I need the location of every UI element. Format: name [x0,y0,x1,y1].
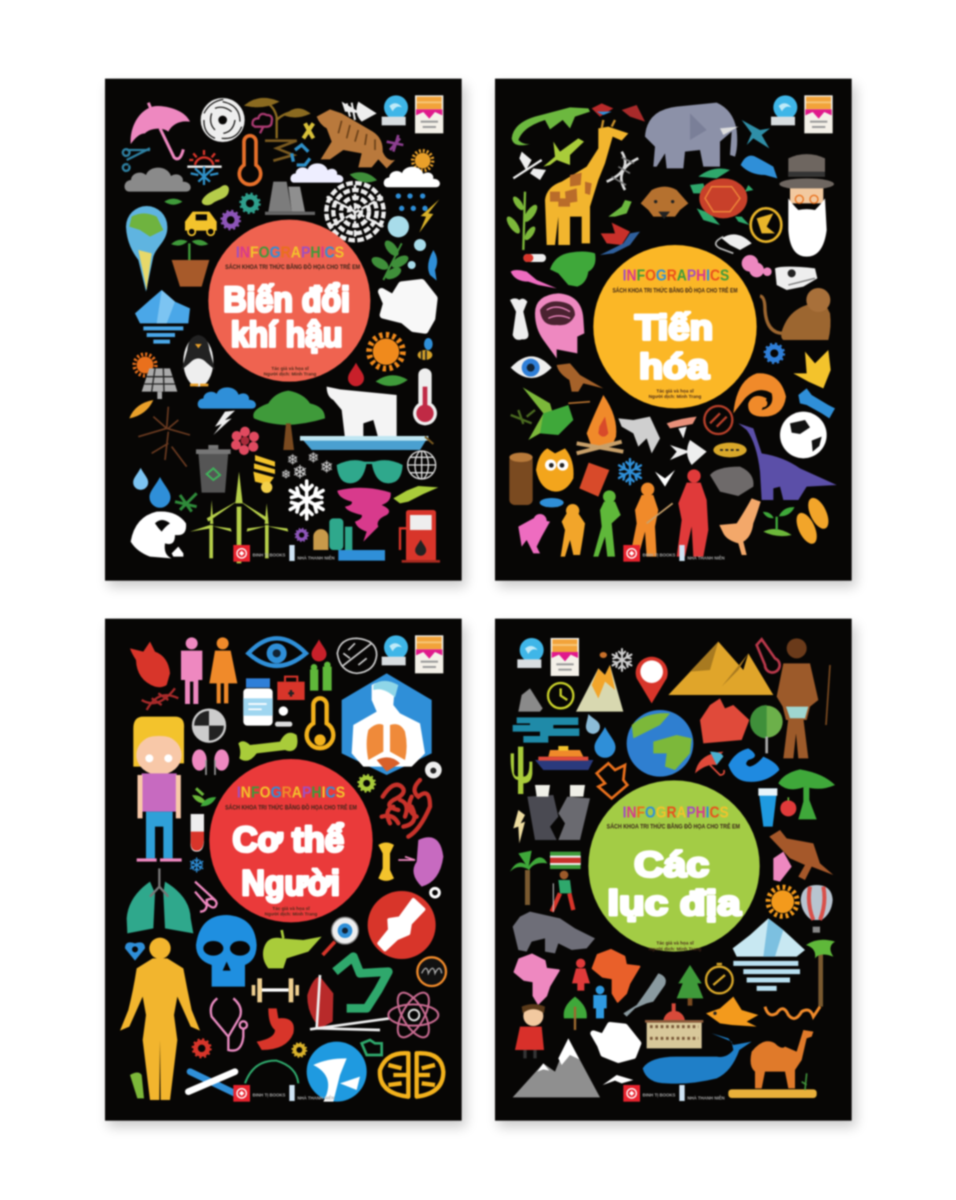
icon: dragonfly [175,493,197,512]
icon: small green bird [608,200,632,217]
icon: red medical kit [277,677,305,700]
icon: compass [706,964,733,993]
icon: blue wave [728,748,779,782]
icon: red joint disc [368,891,436,959]
publisher marks: NHÀ THANH NIÊN [297,555,335,560]
icon: snowflake [611,649,633,671]
title circle: SÁCH KHOA TRI THỨC BẰNG ĐỒ HỌA CHO TRẺ EM [225,261,360,271]
icon: orange woman [209,637,237,703]
icon: yellow brain [380,1053,443,1097]
icon: crossed bones [188,1072,235,1093]
publisher marks: ĐINH TỊ BOOKS [643,1093,675,1098]
icon: owl [536,448,574,492]
icon: campfire [577,395,623,453]
book shadows [108,85,856,1127]
title circle: khí hậu [231,316,342,355]
icon: glass of water [758,788,777,827]
icon: snowy peak [603,1075,633,1085]
publisher badges [382,635,443,673]
icon: pink umbrella [131,103,190,159]
icon: blue snowflake [190,858,204,872]
icon: green tree [564,997,587,1030]
title circle: SÁCH KHOA TRI THỨC BẰNG ĐỒ HỌA CHO TRẺ EM [225,801,357,811]
icon: apple [780,797,796,816]
icon: red gear [193,1039,211,1057]
icon: green bird [543,138,584,167]
icon: green lizard [512,107,590,145]
series name: INFOGRAPHICS [236,244,344,261]
icon: brown dog [641,187,688,219]
icon: seedling in pot [171,238,209,287]
icon: canyon [527,785,590,840]
icon: red Australia [700,698,749,743]
icon: green branch [369,238,410,282]
icon: white coral [326,183,384,240]
title circle: SÁCH KHOA TRI THỨC BẰNG ĐỒ HỌA CHO TRẺ EM [607,821,740,831]
icon: leaf [164,199,182,205]
icon: red heart [130,642,170,687]
icon: white dragonfly [513,152,546,180]
icon: hiker [552,871,573,912]
icon: child in red [515,1004,545,1058]
icon: orange leaf outline [597,763,627,798]
icon: white ring [431,888,439,897]
icon: skin circle [417,957,446,986]
icon: yellow bulb [253,455,275,493]
icon: green leaf [349,170,378,185]
icon: small umbrella [695,752,724,775]
icon: green frog [550,251,595,287]
icon: pink head with brain [535,293,584,358]
icon: yellow oval fossil [751,208,781,242]
icon: dumbbell [252,978,299,1002]
icon: green gear [358,775,375,792]
icon: lake [513,717,579,743]
icon: orange fish [706,997,758,1027]
icon: white mouse [716,234,752,253]
icon: magnified eye [323,917,358,955]
icon: blue eye [248,638,306,666]
icon: fish skeleton [342,102,377,122]
icon: turtle [690,168,753,225]
icon: sand strip and plant [728,1073,817,1098]
title circle: Tác giả và họa sĩ [271,366,309,371]
icon: scissors [123,148,150,171]
icon: grey mountains [513,1038,600,1097]
icon: seedling and test tube [190,788,218,852]
icon: log [509,453,533,505]
icon: lightning [513,810,525,843]
icon: Darwin portrait [779,154,834,257]
icon: ammonite [733,373,786,417]
icon: arm muscle [307,975,390,1030]
icon: fish bones [670,440,707,465]
icon: yellow car [185,212,217,235]
icon: blue snowflake [617,459,643,484]
icon: white football [425,762,442,778]
icon: grasshopper [511,410,535,424]
icon: spiral hurricane [201,98,245,142]
icon: teal lungs [127,868,193,933]
series name: INFOGRAPHICS [623,804,729,821]
title circle: Tác giả và họa sĩ [656,940,694,945]
icon: purple insect [387,135,403,152]
icon: dome and tanks [313,518,385,561]
icon: orange leaf [129,400,153,418]
icon: orange sun [369,335,403,369]
icon: pink ape [518,514,550,553]
icon: hand with leaf [393,486,438,503]
icon: tiger [317,109,395,168]
icon: green leaf [375,374,408,387]
icon: orange Africa [593,950,639,1002]
icon: black white disc [193,710,225,742]
publisher badges [771,95,833,133]
title circle: lục địa [607,884,741,923]
icon: pine tree [677,965,703,1006]
icon: eye [511,356,552,378]
icon: giraffe [545,120,628,245]
icon: small snowflakes [282,452,332,478]
icon: kangaroo [769,830,833,880]
book cover: Cơ thể người [105,619,462,1121]
book cover: Tiến hóa [495,79,852,581]
title circle: SÁCH KHOA TRI THỨC BẰNG ĐỒ HỌA CHO TRẺ EM [612,285,737,295]
icon: blue fish [741,156,777,178]
icon: purple dinosaur [738,423,837,500]
icon: orange snake [765,1007,820,1018]
icon: hot air balloon [801,885,833,933]
icon: rain [396,193,428,211]
icon: red book [579,463,609,497]
icon: white arrow [655,470,675,487]
icon: palm tree [806,940,835,1007]
icon: blue circle [307,1042,367,1102]
icon: red human [677,469,708,557]
icon: blue whale [643,1033,752,1084]
icon: red and blue bird [600,223,640,255]
icon: grey elephant [645,103,738,168]
title circle: Người dịch: Minh Trang [649,394,702,399]
icon: green aviator glasses [337,460,403,483]
icon: brown monkey [760,288,831,340]
title circle: hóa [639,347,709,386]
publisher marks: NHÀ THANH NIÊN [297,1095,335,1100]
icon: grey cloud [125,168,191,192]
icon: yellow thermometer [307,698,333,748]
icon: pink flower [231,427,259,455]
icon: bee [418,338,433,360]
icon: bubbles and fish [408,239,437,281]
title circle: Người dịch: Minh Trang [265,911,318,916]
icon: red birds [592,103,645,122]
icon: thermometer bulb [314,734,326,746]
icon: atom [388,988,438,1042]
title circle [588,780,760,952]
icon: red DNA [142,688,178,710]
icon: green plant [504,192,540,250]
icon: red thermometer [757,639,780,672]
icon: green thumb [362,1040,382,1055]
icon: blue virus [765,344,784,363]
icon: hen [719,498,761,555]
icon: melting globe [126,206,167,292]
icon: dark zigzag [265,141,297,161]
icon: pink organ [398,837,443,887]
icon: purple flower [222,211,240,229]
icon: white bone [510,298,528,340]
icon: green colon [335,957,388,1008]
icon: cactus [511,747,532,794]
icon: rhino [513,912,595,953]
publisher marks: ĐINH TỊ BOOKS [253,1093,285,1098]
icon: orange feet [792,495,833,547]
icon: pink tadpole [511,270,557,288]
publisher marks: NHÀ THANH NIÊN [687,555,725,560]
icon: polar bear on ice [300,387,428,450]
icon: blue iceberg [135,290,190,342]
icon: anatomy hexagon [342,673,432,775]
icon: recycling bin [196,445,231,493]
icon: green early human [593,490,621,557]
icon: two drops [133,468,170,508]
icon: yellow cross [303,123,313,138]
icon: green pancreas [263,930,322,968]
icon: blue cloud and lightning [198,387,256,435]
publisher marks: NHÀ THANH NIÊN [687,1095,725,1100]
icon: teal virus [240,194,259,213]
title circle: Cơ thể [232,821,344,860]
icon: penguin [182,335,215,387]
icon: red drop [311,639,326,661]
icon: orange thermometer [239,136,261,184]
icon: volcano [576,652,623,712]
icon: pink stethoscope [211,998,247,1051]
title circle [593,245,757,408]
series name: INFOGRAPHICS [237,784,345,801]
icon: cooling towers [265,182,315,215]
icon: pink nerve [195,882,217,912]
icon: grey rabbit [618,417,660,453]
icon: teal pterosaur [742,120,770,148]
icon: mushrooms [667,417,697,438]
icon: white globe [780,412,827,458]
icon: blue heart [125,942,145,961]
icon: white Antarctica [593,1025,638,1060]
title circle: Tác giả và họa sĩ [272,906,310,911]
icon: sprout [762,504,796,536]
icon: red woman [572,959,590,991]
icon: tiny insect [425,437,433,444]
icon: lightning [419,199,439,233]
icon: pink kidneys [192,749,229,775]
icon: acacia tree [778,769,835,819]
icon: large snowflake [288,481,326,519]
icon: ice ball [388,216,409,237]
icon: yellow human body [120,938,200,1100]
icon: pills [275,706,292,727]
icon: white cloud [290,163,343,183]
icon: green group [310,662,332,691]
title circle [209,759,373,922]
icon: seal [623,973,666,1017]
publisher marks [233,1085,335,1102]
icon: green bone [238,733,297,761]
icon: wire globe [408,451,436,479]
icon: purple flower [295,529,308,541]
publisher marks [623,1085,725,1102]
icon: dry roots [138,407,190,467]
icon: map pin [636,657,668,703]
icon: pink Africa [514,954,559,1004]
icon: yellow bone [378,842,394,881]
icon: green footprint [200,185,231,206]
icon: recycle [292,145,310,165]
icon: hummingbird [523,387,590,440]
title circle: Tiến [635,308,713,347]
icon: flag [550,852,581,869]
icon: blue bone [798,388,835,418]
icon: white Antarctica [382,283,434,330]
title circle: Các [634,846,709,885]
icon: sun and frost [187,150,222,185]
publisher marks [233,545,335,562]
icon: medicine jar [243,678,273,726]
publisher marks [623,545,725,562]
icon: blue bacterium [540,498,564,507]
title circle: Người dịch: Minh Trang [649,946,702,951]
publisher badges [517,638,579,676]
title circle: Biến đổi [223,281,350,320]
icon: sun behind cloud [384,151,440,187]
icon: red stomach [257,1008,294,1050]
icon: blue skull [196,915,257,987]
icon: white wave [131,511,186,558]
icon: red intestine [382,780,430,837]
icon: orange human with spear [630,483,673,557]
icon: camel [751,1030,813,1088]
icon: capsule [523,254,546,262]
icon: South America pink [773,852,792,882]
icon: Earth globe [627,710,693,777]
icon: green foot [130,1072,144,1098]
icon: grey rock [518,688,543,712]
icon: wind turbines [190,472,288,563]
icon: pink blob [742,255,772,277]
title circle: Người dịch: Minh Trang [264,371,317,376]
icon: ship [535,746,593,770]
icon: red drop [348,363,364,386]
icon: orange sun [768,887,797,916]
icon: pale iceberg [733,918,805,988]
series name: INFOGRAPHICS [623,268,729,285]
icon: red fuel pump [400,510,440,563]
title circle: Tác giả và họa sĩ [656,389,694,394]
icon: green head outline [245,1061,298,1083]
icon: thermometer [413,368,437,425]
icon: DNA [607,152,638,190]
book cover: Biến đổi khí hậu [105,79,462,581]
icon: brown dinosaur [557,363,603,392]
title circle [208,220,370,382]
book cover: Các lục địa [495,619,852,1121]
icon: grey rock [710,467,753,496]
icon: white outline brain [337,638,377,673]
icon: green tree [253,391,325,450]
icon: yellow pattern [713,443,747,457]
icon: pink cloud outline [253,114,272,133]
icon: dark gold plant [247,99,308,138]
publisher badges [382,95,443,133]
publisher marks: ĐINH TỊ BOOKS [253,553,285,558]
icon: drops [582,712,615,758]
icon: palm tree [510,851,547,905]
icon: domed building [645,1003,703,1048]
publisher marks: ĐINH TỊ BOOKS [643,553,675,558]
icon: sun and solar panel [134,354,177,399]
icon: red fossil disc [704,406,732,434]
icon: tribal man [777,638,830,758]
icon: pink man [181,637,202,704]
icon: round tree [750,705,783,753]
icon: clock [548,683,573,708]
icon: pyramids [668,642,773,695]
icon: yellow footprint [793,350,831,388]
icon: pink tornado [337,488,391,542]
icon: blonde girl [133,717,184,860]
title circle: Người [241,864,340,903]
icon: dinosaur skull [775,267,817,290]
icon: yellow gear [292,1043,306,1057]
icon: orange early human [561,504,585,557]
icon: blue man [593,986,607,1018]
